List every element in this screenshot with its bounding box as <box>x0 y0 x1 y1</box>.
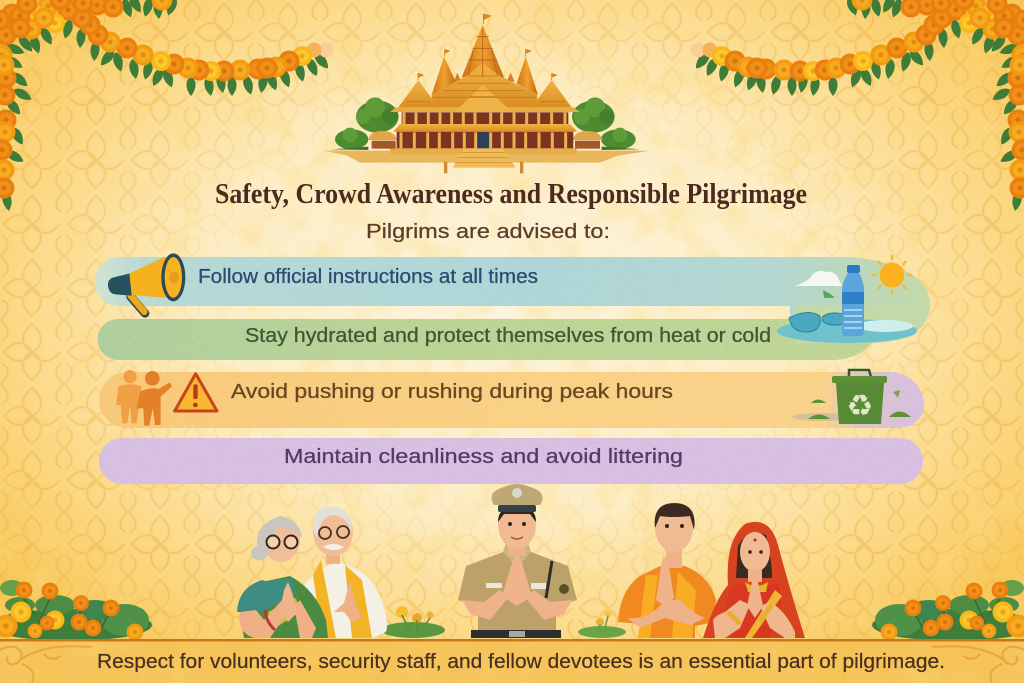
icon: water scene with bottle and sun <box>777 255 917 343</box>
person: woman in red saree <box>703 522 805 638</box>
trees <box>332 97 640 150</box>
sun <box>880 262 904 288</box>
garland: top left <box>0 0 334 212</box>
panel: instruction band 3 <box>99 372 924 428</box>
icon: recycling bin <box>792 370 911 424</box>
band grain <box>95 257 930 484</box>
plant: left <box>381 606 445 638</box>
temple illustration <box>323 14 650 173</box>
side huts <box>368 131 603 149</box>
panel: instruction band 4 <box>99 438 923 484</box>
temple flags <box>418 14 557 80</box>
band 1 text: Follow official instructions at all times <box>198 266 538 288</box>
person: elderly man <box>305 507 387 638</box>
person: young man <box>618 503 716 638</box>
band 2 text: Stay hydrated and protect themselves from heat or cold <box>245 325 771 347</box>
band 4 text: Maintain cleanliness and avoid littering <box>284 446 683 468</box>
person: security officer <box>458 484 577 638</box>
temple ground <box>323 151 650 163</box>
panel: instruction band 1 <box>94 257 930 343</box>
people illustration <box>237 484 805 638</box>
panel: instruction band 2 <box>98 306 929 360</box>
flower bed: left <box>0 580 152 641</box>
front steps <box>444 148 523 173</box>
person: elderly woman <box>237 516 328 638</box>
plant: right <box>578 611 626 638</box>
band 3 text: Avoid pushing or rushing during peak hours <box>231 381 673 403</box>
icon: crowd and warning <box>116 370 217 426</box>
footer banner <box>0 639 1024 683</box>
title: Safety, Crowd Awareness and Responsible Pilgrimage <box>215 179 807 210</box>
colonnades <box>393 112 577 148</box>
garland: top right <box>690 0 1024 212</box>
icon: recycling bin: ♻ <box>847 389 873 424</box>
cloud <box>795 271 842 286</box>
subtitle: Pilgrims are advised to: <box>366 221 610 243</box>
upper roofs <box>390 25 579 112</box>
flower bed: right <box>872 580 1024 641</box>
icon: megaphone <box>108 253 185 313</box>
footer text: Respect for volunteers, security staff, and fellow devotees is an essential part of pilgrimage. <box>97 651 945 673</box>
bowl <box>789 312 820 332</box>
leaf <box>823 290 834 298</box>
water bottle <box>847 265 860 273</box>
